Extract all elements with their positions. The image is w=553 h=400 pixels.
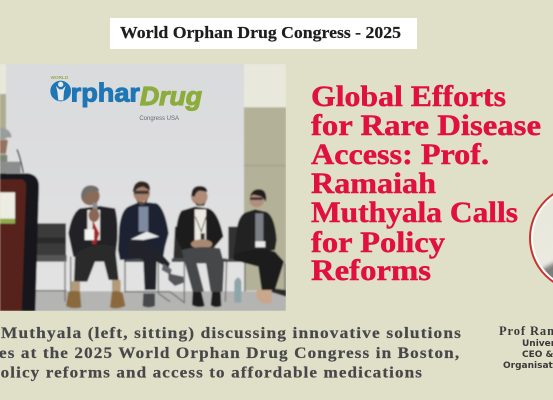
- portrait of Prof Ramaiah Muthyala: [529, 193, 553, 283]
- speaker name and titles: [499, 324, 553, 371]
- left empty chair: [36, 223, 66, 261]
- photo: panel discussion on stage: [0, 64, 286, 311]
- photo caption: [0, 325, 462, 382]
- headline: Ramaiah: [311, 168, 436, 200]
- photo caption: es at the 2025 World Orphan Drug Congress in Boston,: [0, 344, 460, 362]
- header banner: World Orphan Drug Congress - 2025: [120, 23, 401, 42]
- microphone: [17, 149, 23, 173]
- backdrop logo: rphar: [71, 78, 140, 108]
- person 1: [68, 206, 118, 260]
- backdrop logo: Drug: [140, 81, 202, 111]
- headline: Muthyala Calls: [311, 197, 518, 229]
- photo caption: Muthyala (left, sitting) discussing innovative solutions: [1, 325, 462, 342]
- backdrop logo: WORLD: [51, 75, 69, 80]
- podium: [0, 173, 39, 311]
- chair frames: [71, 257, 285, 303]
- person 3: [176, 207, 223, 250]
- person 2: [118, 202, 169, 260]
- speaker at podium: [0, 155, 7, 162]
- headline: for Policy: [311, 227, 445, 259]
- water bottle: [234, 277, 241, 303]
- backdrop logo: Congress USA: [139, 115, 180, 122]
- headline: Access: Prof.: [311, 139, 489, 171]
- laptop: [0, 162, 21, 173]
- photo caption: policy reforms and access to affordable medications: [0, 364, 423, 382]
- headline: for Rare Disease: [311, 110, 541, 142]
- headline: Global Efforts: [311, 81, 506, 113]
- headline: Reforms: [311, 255, 431, 287]
- backdrop logo: [50, 75, 202, 122]
- person 4: [233, 209, 277, 257]
- headline: [311, 81, 541, 287]
- header banner: [110, 18, 417, 49]
